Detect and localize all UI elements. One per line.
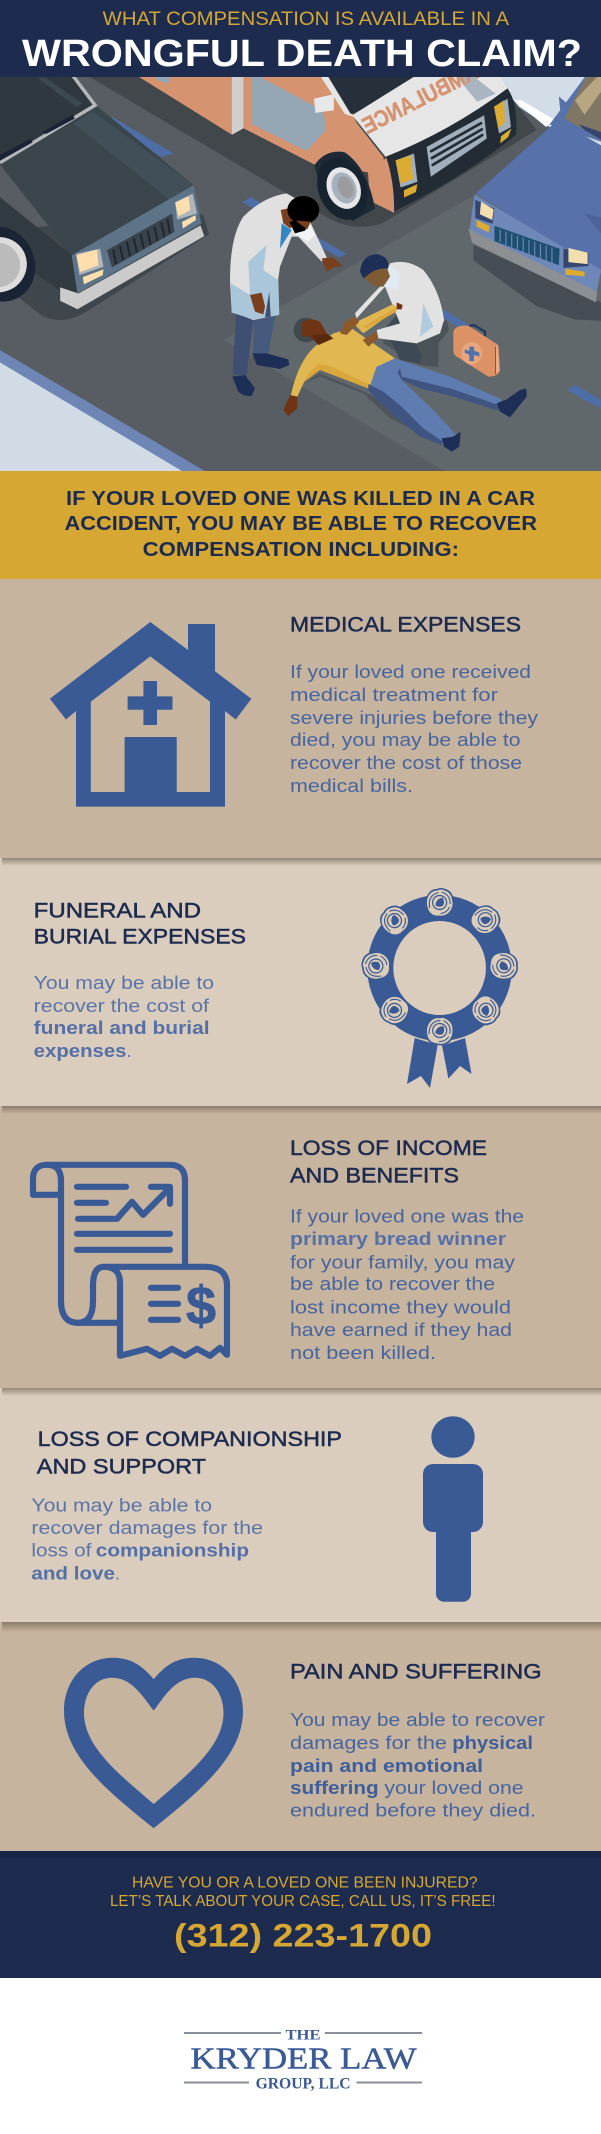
body text: funeral and burial	[34, 1018, 210, 1038]
body text	[31, 1496, 263, 1583]
body text: endured before they died.	[290, 1801, 536, 1821]
icon: heart outline	[64, 1658, 243, 1828]
heading: FUNERAL AND	[34, 900, 201, 922]
body text: damages for the	[290, 1733, 447, 1753]
body text: primary bread winner	[290, 1229, 506, 1249]
heading	[37, 1428, 342, 1478]
lane marks	[112, 117, 601, 409]
body text: medical treatment for	[290, 685, 498, 705]
ambulance lettering: AMBULANCE	[358, 58, 482, 139]
heading: LOSS OF COMPANIONSHIP	[38, 1428, 342, 1451]
icon: document and receipt	[33, 1165, 227, 1356]
ground shadows	[294, 318, 449, 432]
body text: for your family, you may	[290, 1252, 515, 1272]
intro text: ACCIDENT, YOU MAY BE ABLE TO RECOVER	[64, 513, 538, 535]
body text: companionship	[96, 1541, 249, 1561]
body text: have earned if they had	[290, 1320, 512, 1340]
first-aid kit	[453, 325, 500, 377]
body text	[290, 662, 538, 796]
heading: MEDICAL EXPENSES	[290, 614, 521, 637]
injured patient	[283, 302, 527, 452]
body text	[290, 1710, 545, 1821]
icon: house with medical cross	[50, 622, 251, 807]
standing doctor	[230, 193, 343, 396]
intro text	[64, 488, 538, 561]
ambulance	[90, 77, 536, 227]
body text: your loved one	[384, 1778, 524, 1798]
body text: be able to recover the	[290, 1274, 495, 1294]
heading: AND BENEFITS	[290, 1165, 459, 1188]
body text: pain and emotional	[290, 1756, 483, 1776]
heading: LOSS OF INCOME	[290, 1137, 487, 1160]
heading: BURIAL EXPENSES	[34, 926, 246, 949]
illustration: accident scene	[0, 58, 601, 475]
heading: PAIN AND SUFFERING	[290, 1661, 542, 1684]
body text: recover the cost of	[34, 996, 210, 1016]
intro banner	[0, 471, 601, 579]
logo: The Kryder Law Group, LLC: GROUP, LLC	[256, 2075, 351, 2092]
heading: AND SUPPORT	[37, 1455, 206, 1478]
body text: loss of	[31, 1541, 93, 1561]
body text: severe injuries before they	[290, 708, 538, 728]
body text: .	[126, 1041, 132, 1061]
main title: WRONGFUL DEATH CLAIM?	[22, 33, 582, 75]
phone number: (312) 223-1700	[174, 1918, 432, 1954]
body text: If your loved one was the	[290, 1206, 524, 1226]
body text: expenses	[34, 1041, 127, 1061]
intro text: COMPENSATION INCLUDING:	[143, 539, 459, 561]
panel: loss of income and benefits	[0, 1106, 601, 1388]
body text	[34, 973, 214, 1061]
call to action band	[0, 1851, 601, 1978]
body text	[290, 1206, 524, 1363]
logo: The Kryder Law Group, LLC: THE	[286, 2027, 320, 2043]
heading	[290, 1137, 487, 1188]
right blue car	[468, 73, 601, 321]
body text: recover damages for the	[31, 1518, 263, 1538]
icon: funeral wreath	[361, 888, 521, 1088]
icon: person	[423, 1416, 483, 1602]
logo: The Kryder Law Group, LLC	[0, 1978, 601, 2134]
call to action text	[110, 1874, 496, 1910]
body text: recover the cost of those	[290, 753, 522, 773]
body text: suffering	[290, 1778, 379, 1798]
body text: medical bills.	[290, 776, 413, 796]
body text: You may be able to recover	[290, 1710, 545, 1730]
call to action text: HAVE YOU OR A LOVED ONE BEEN INJURED?	[132, 1874, 478, 1891]
panel: loss of companionship and support	[0, 1388, 601, 1622]
logo: The Kryder Law Group, LLC: KRYDER LAW	[190, 2040, 417, 2075]
title band	[0, 0, 601, 77]
left dark car	[0, 73, 209, 320]
body text: died, you may be able to	[290, 730, 520, 750]
panel: medical expenses	[0, 579, 601, 858]
intro text: IF YOUR LOVED ONE WAS KILLED IN A CAR	[66, 488, 536, 510]
call to action text: LET’S TALK ABOUT YOUR CASE, CALL US, IT’S FREE!	[110, 1893, 496, 1910]
body text: If your loved one received	[290, 662, 531, 682]
body text: and love	[31, 1563, 115, 1583]
body text: lost income they would	[290, 1297, 511, 1317]
heading	[34, 900, 246, 949]
body text: physical	[452, 1733, 533, 1753]
panel: pain and suffering	[0, 1622, 601, 1851]
kneeling medic	[355, 254, 444, 364]
body text: You may be able to	[31, 1496, 212, 1516]
body text: not been killed.	[290, 1343, 436, 1363]
panel: funeral and burial expenses	[0, 858, 601, 1106]
icon: dollar sign: $	[186, 1276, 216, 1336]
body text: .	[115, 1563, 120, 1583]
body text: You may be able to	[34, 973, 214, 993]
title kicker: WHAT COMPENSATION IS AVAILABLE IN A	[103, 8, 509, 30]
